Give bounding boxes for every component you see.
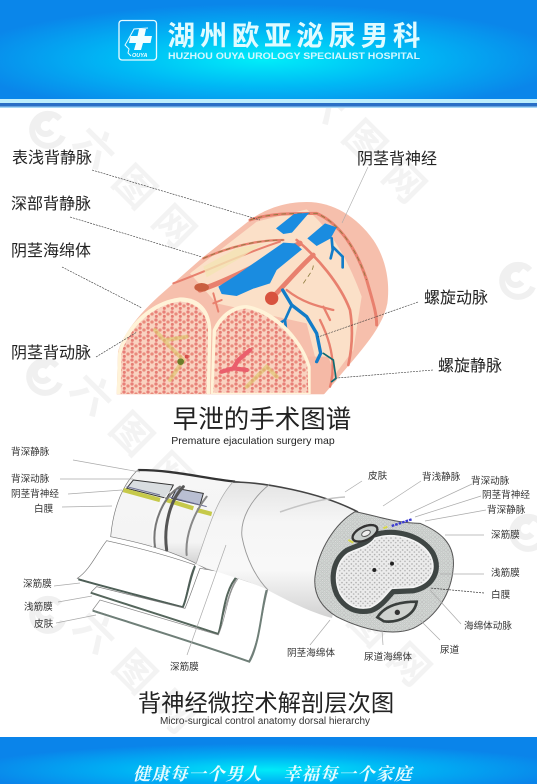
labels: anatomy: 白膜	[491, 589, 511, 601]
labels: anatomy: 海绵体动脉	[464, 620, 512, 632]
labels: anatomy: 皮肤	[368, 470, 388, 482]
artery knobs	[265, 292, 278, 305]
hospital name in English: HUZHOU OUYA UROLOGY SPECIALIST HOSPITAL	[168, 51, 420, 61]
superficial veins: red	[173, 213, 377, 387]
labels: anatomy	[11, 446, 530, 673]
rings	[152, 487, 207, 555]
labels: surgery map: 阴茎背动脉	[11, 344, 91, 362]
labels: anatomy: 背深动脉	[11, 473, 50, 485]
labels: anatomy: 背深动脉	[471, 475, 510, 487]
labels: anatomy: 皮肤	[34, 618, 54, 630]
heading: surgery map: 早泄的手术图谱	[173, 406, 351, 434]
heading: anatomy: 背神经微控术解剖层次图	[138, 690, 394, 716]
labels: anatomy: 阴茎海绵体	[287, 647, 335, 659]
cream tissue strip	[203, 243, 263, 277]
labels: anatomy: 背深静脉	[11, 446, 50, 458]
dorsal vessel	[350, 522, 380, 545]
lower right flesh	[307, 357, 337, 395]
right cavernous body	[211, 305, 311, 394]
heading: surgery map: Premature ejaculation surgery map	[171, 435, 335, 447]
labels: surgery map: 螺旋动脉	[424, 289, 488, 307]
labels: surgery map: 深部背静脉	[11, 195, 91, 213]
labels: surgery map	[11, 149, 502, 375]
icon: hospital logo	[119, 20, 156, 60]
labels: anatomy: 阴茎背神经	[11, 488, 59, 500]
labels: anatomy: 深筋膜	[491, 529, 520, 541]
labels: surgery map: 阴茎背神经	[357, 150, 437, 168]
header band	[0, 0, 537, 108]
footer band	[0, 737, 537, 784]
coloured layers	[138, 470, 235, 482]
blue dorsal veins	[218, 213, 337, 296]
labels: anatomy: 尿道海绵体	[364, 651, 412, 663]
bottom fade	[113, 394, 333, 397]
outer body	[117, 202, 388, 395]
labels: anatomy: 浅筋膜	[24, 601, 53, 613]
labels: anatomy: 浅筋膜	[491, 567, 520, 579]
labels: anatomy: 阴茎背神经	[482, 489, 530, 501]
nerve accent	[392, 519, 412, 526]
dark fascia band and inner cavernous body	[337, 536, 433, 608]
heading: surgery map	[171, 406, 351, 447]
inner tube	[111, 469, 240, 573]
illustration: outer skin tube	[196, 482, 358, 618]
leader lines: anatomy	[54, 460, 486, 655]
leader lines: surgery map	[62, 167, 433, 378]
labels: surgery map: 螺旋静脉	[438, 357, 502, 375]
labels: anatomy: 背浅静脉	[422, 471, 461, 483]
hospital name: 湖州欧亚泌尿男科	[168, 20, 425, 51]
icon: hospital logo: OUYA	[132, 53, 148, 59]
labels: anatomy: 背深静脉	[487, 504, 526, 516]
lower folded sheets	[77, 541, 195, 607]
illustration: dorsal nerve anatomy cross-section	[315, 512, 453, 632]
illustration: dorsal nerve anatomy left, layered sleeves	[77, 469, 268, 662]
labels: anatomy: 白膜	[34, 503, 54, 515]
labels: anatomy: 深筋膜	[170, 661, 199, 673]
heading: anatomy: Micro-surgical control anatomy dorsal hierarchy	[160, 716, 370, 727]
labels: anatomy: 尿道	[440, 644, 460, 656]
left cavernous body	[117, 297, 211, 394]
urethra	[377, 602, 417, 622]
outer ring	[315, 512, 453, 632]
labels: surgery map: 表浅背静脉	[12, 149, 92, 167]
tissue centre colouring	[155, 330, 277, 387]
labels: anatomy: 深筋膜	[23, 578, 52, 590]
illustration: premature ejaculation surgery section	[113, 202, 388, 397]
labels: surgery map: 阴茎海绵体	[11, 242, 91, 260]
